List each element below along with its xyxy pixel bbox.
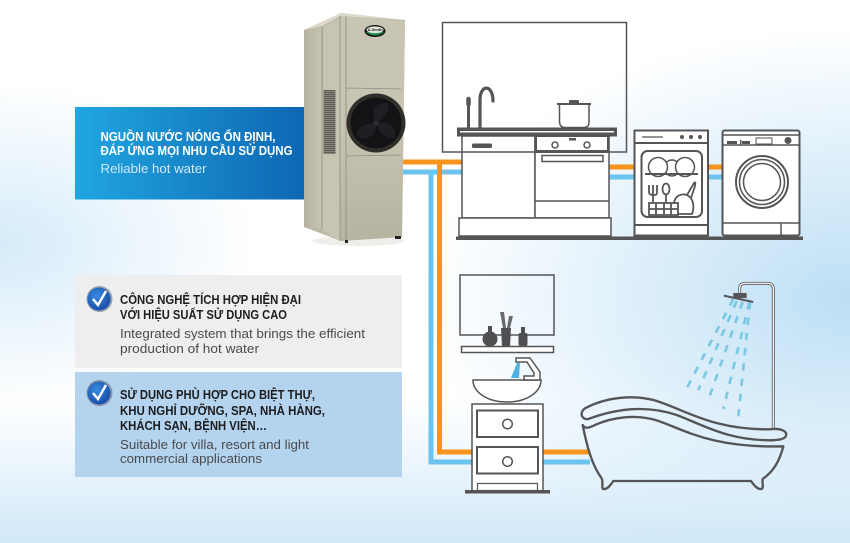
callout: reliable hot water: ĐÁP ỨNG MỌI NHU CẦU SỬ DỤNG <box>100 143 292 158</box>
panel: suitable applications: Suitable for villa, resort and light <box>120 437 309 452</box>
shower pipe <box>740 283 773 429</box>
panel: integrated system: VỚI HIỆU SUẤT SỬ DỤNG CAO <box>120 307 287 322</box>
washer door <box>736 156 788 208</box>
shower head <box>724 293 753 303</box>
drawers <box>477 410 538 490</box>
brand logo <box>364 25 386 37</box>
oven <box>535 136 609 218</box>
plates <box>645 158 698 176</box>
callout: reliable hot water: NGUỒN NƯỚC NÓNG ỔN ĐỊNH, <box>100 129 276 144</box>
cooking pot <box>557 100 591 128</box>
washing machine <box>722 130 800 236</box>
heat pump water heater unit <box>304 13 406 246</box>
icon: check badge <box>86 380 112 406</box>
countertop <box>457 128 617 136</box>
sink and tap <box>473 358 541 402</box>
bathroom mirror <box>460 275 554 335</box>
callout: reliable hot water: Reliable hot water <box>100 161 207 176</box>
kitchen wall panel <box>442 22 626 152</box>
toiletries on shelf <box>482 312 528 346</box>
hot and cold water pipes <box>403 162 722 462</box>
cabinet <box>462 136 535 218</box>
sink faucets <box>468 88 493 128</box>
callout: reliable hot water <box>75 107 307 200</box>
shower <box>685 283 773 429</box>
cutlery and basket <box>649 182 695 215</box>
panel: integrated system: Integrated system that brings the efficient <box>120 326 365 341</box>
kitchen unit <box>442 22 803 240</box>
bathtub <box>582 397 786 489</box>
panel: integrated system: CÔNG NGHỆ TÍCH HỢP HIỆN ĐẠI <box>120 292 301 307</box>
control panel <box>727 137 792 145</box>
bathroom shelf <box>462 346 554 352</box>
panel: suitable applications <box>75 372 402 477</box>
vanity cabinet <box>465 404 550 494</box>
fan <box>346 94 406 152</box>
dishwasher <box>634 130 708 236</box>
panel: suitable applications: KHU NGHỈ DƯỠNG, SPA, NHÀ HÀNG, <box>120 403 325 418</box>
water spray <box>685 299 750 417</box>
icon: check badge <box>86 286 112 312</box>
brand logo: A.Smith <box>367 27 383 32</box>
tub body <box>583 417 783 489</box>
vent grille <box>324 90 336 154</box>
panel: suitable applications: KHÁCH SẠN, BỆNH VIỆN… <box>120 418 267 433</box>
tub rim <box>582 397 786 440</box>
panel: integrated system <box>75 275 402 368</box>
panel: integrated system: production of hot water <box>120 341 260 356</box>
panel: suitable applications: commercial applications <box>120 451 262 466</box>
panel: suitable applications: SỬ DỤNG PHÙ HỢP CHO BIỆT THỰ, <box>120 387 315 402</box>
floor line <box>456 236 803 240</box>
